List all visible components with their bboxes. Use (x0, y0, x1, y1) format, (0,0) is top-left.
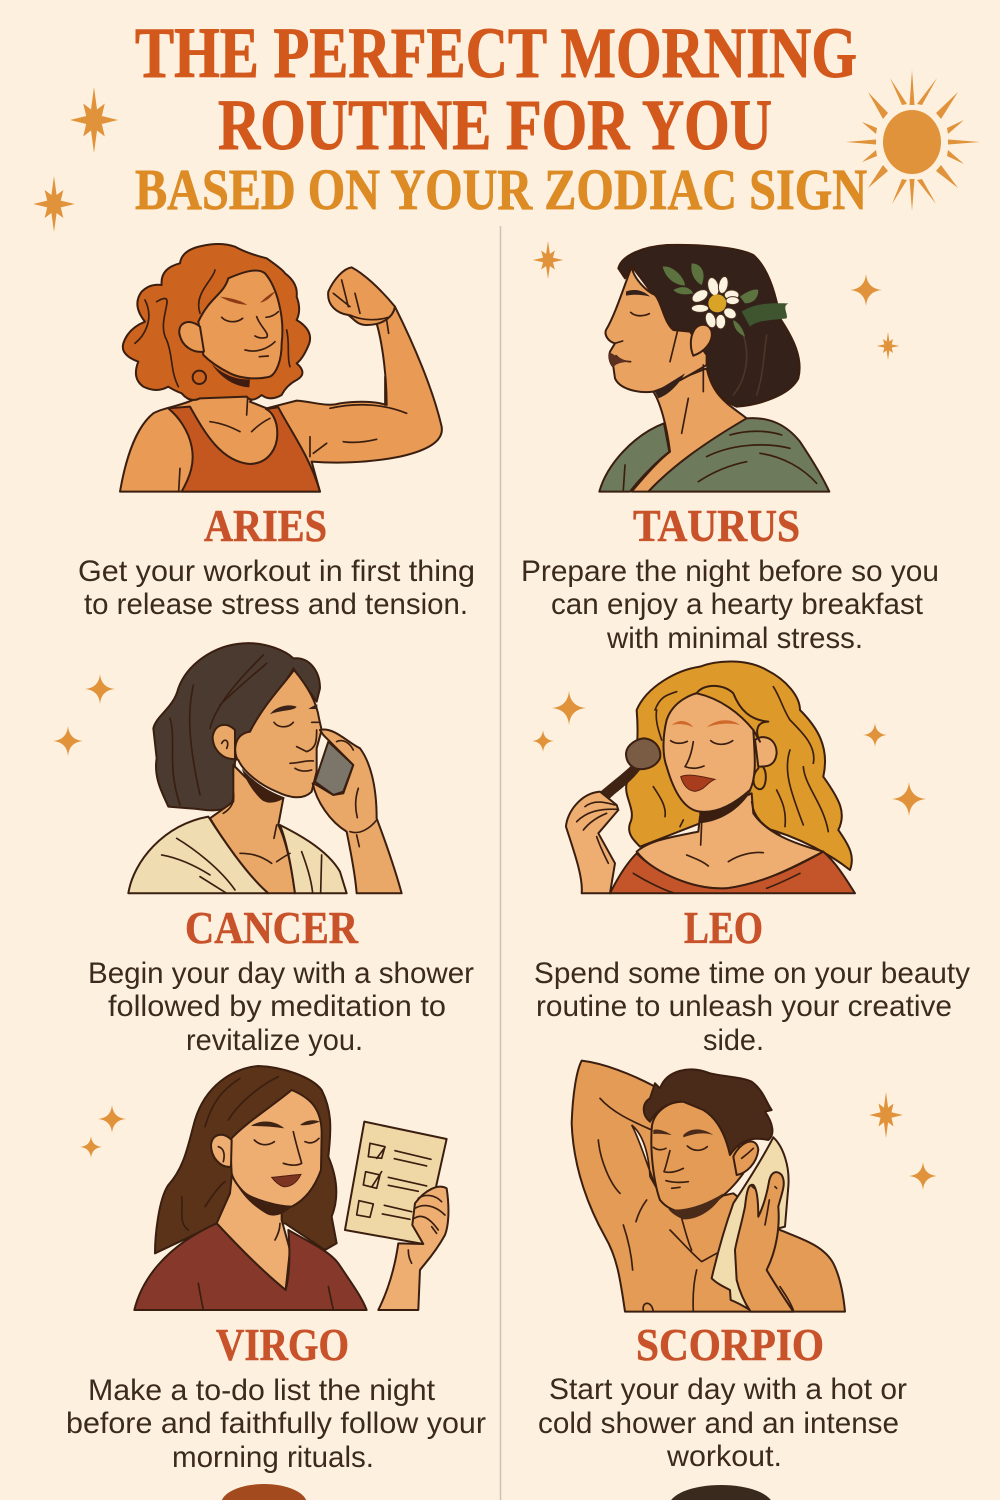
body text: Prepare the night before so you (521, 555, 939, 588)
body text: side. (703, 1024, 764, 1057)
illustration: leo woman applying makeup (566, 661, 855, 893)
icon: sparkles (869, 1092, 937, 1190)
body text (78, 555, 475, 621)
body text: followed by meditation to (108, 990, 446, 1023)
icon: checklist marks (357, 1143, 431, 1219)
panel: cancer (53, 643, 474, 1057)
panel: taurus (521, 235, 939, 655)
illustration: cropped hair bottom left (221, 1484, 307, 1500)
body text (521, 555, 939, 655)
heading: VIRGO (216, 1319, 349, 1370)
body text (534, 957, 970, 1057)
icon: daisy flower (690, 276, 739, 329)
body text: before and faithfully follow your (66, 1407, 486, 1440)
title: ROUTINE FOR YOU (218, 85, 772, 165)
panel: leo (532, 661, 970, 1057)
body text: Start your day with a hot or (549, 1373, 907, 1406)
illustration: scorpio man with towel (572, 1061, 845, 1312)
body text: cold shower and an intense (538, 1407, 899, 1440)
icon: sparkles (53, 674, 115, 756)
heading: CANCER (185, 902, 359, 953)
panel: virgo (66, 1066, 486, 1474)
header (33, 13, 980, 232)
illustration: aries woman flexing (120, 244, 442, 492)
body text (66, 1374, 486, 1474)
title: THE PERFECT MORNING (135, 13, 857, 93)
panel: scorpio (538, 1061, 937, 1473)
icon: sparkles (533, 241, 899, 360)
body text: Get your workout in first thing (78, 555, 475, 588)
body text: Make a to-do list the night (88, 1374, 436, 1407)
body text: routine to unleash your creative (536, 990, 952, 1023)
body text: can enjoy a hearty breakfast (551, 588, 924, 621)
body text: morning rituals. (172, 1441, 374, 1474)
icon: sparkle lower left (33, 176, 75, 232)
heading: TAURUS (633, 500, 800, 551)
heading: ARIES (204, 500, 327, 551)
icon: sparkles (532, 691, 926, 816)
body text: with minimal stress. (606, 622, 863, 655)
body text: workout. (666, 1440, 782, 1473)
body text: to release stress and tension. (84, 588, 468, 621)
body text: revitalize you. (186, 1024, 363, 1057)
illustration: taurus woman with flower (590, 235, 829, 492)
icon: sparkle top left (70, 87, 118, 153)
heading: SCORPIO (636, 1319, 824, 1370)
icon: sparkles (80, 1105, 126, 1158)
title (135, 13, 857, 165)
icon: sun (846, 70, 980, 211)
body text: Begin your day with a shower (88, 957, 474, 990)
illustration: cancer woman on phone (128, 643, 402, 893)
panel: aries (78, 244, 475, 621)
body text: Spend some time on your beauty (534, 957, 970, 990)
body text (538, 1373, 907, 1473)
subtitle: BASED ON YOUR ZODIAC SIGN (135, 157, 867, 222)
illustration: virgo woman with checklist (134, 1066, 448, 1310)
illustration: cropped hair bottom right (669, 1485, 773, 1500)
heading: LEO (684, 902, 763, 953)
body text (88, 957, 474, 1057)
